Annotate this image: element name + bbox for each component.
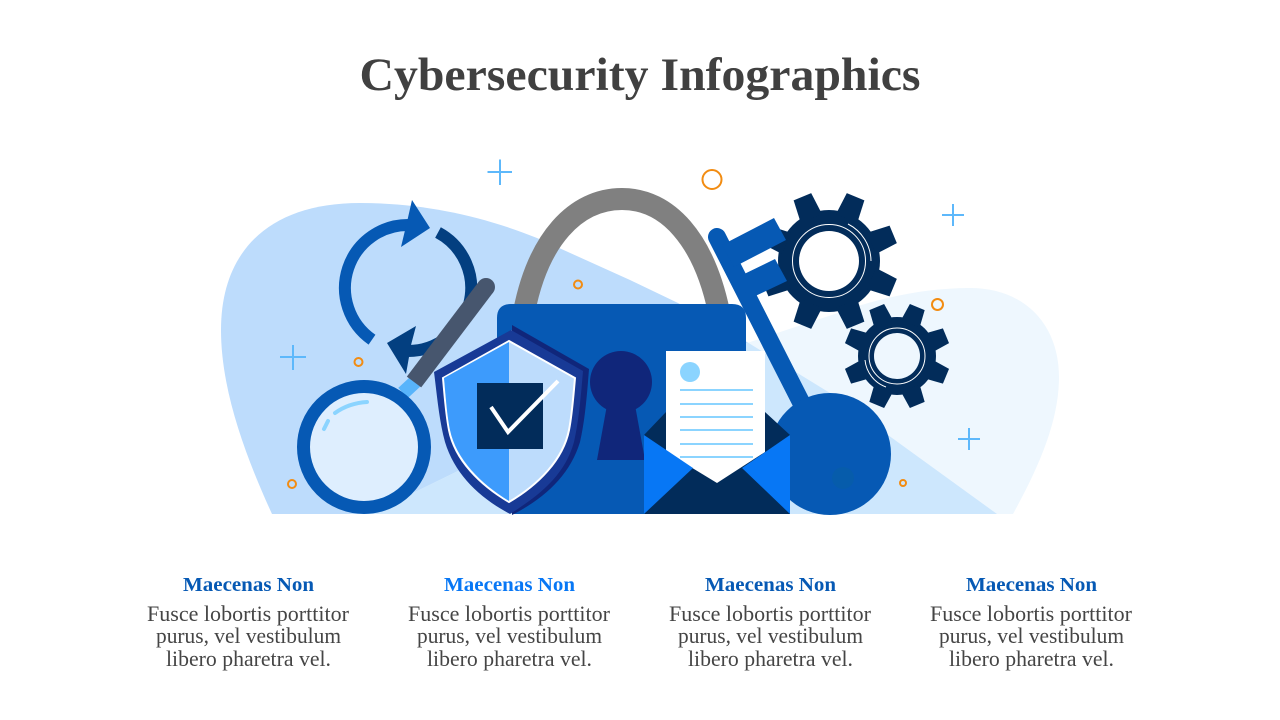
magnifying glass (304, 278, 495, 508)
title: Cybersecurity Infographics (360, 49, 920, 101)
envelope with letter (644, 351, 790, 514)
column 4 (930, 574, 1133, 671)
background blob: left (221, 203, 997, 514)
padlock shackle (524, 199, 719, 312)
column 1: Maecenas Non (183, 574, 314, 596)
column 3 (669, 574, 872, 671)
background blob overlap (370, 342, 997, 514)
column 3: Fusce lobortis porttitor (669, 601, 872, 626)
column 2 (408, 574, 611, 671)
column 3: purus, vel vestibulum (678, 623, 863, 648)
column 2: libero pharetra vel. (427, 646, 592, 671)
column 3: Maecenas Non (705, 574, 836, 596)
shield with check (434, 325, 589, 515)
column 4: libero pharetra vel. (949, 646, 1114, 671)
keyhole (590, 351, 652, 460)
orange ring dots (288, 170, 943, 488)
padlock body (497, 304, 746, 514)
column 2: purus, vel vestibulum (417, 623, 602, 648)
column 4: Fusce lobortis porttitor (930, 601, 1133, 626)
small gear (844, 303, 950, 409)
column 2: Maecenas Non (444, 574, 575, 596)
key (717, 218, 891, 515)
column 1: Fusce lobortis porttitor (147, 601, 350, 626)
column 4: Maecenas Non (966, 574, 1097, 596)
column 1: purus, vel vestibulum (156, 623, 341, 648)
column 2: Fusce lobortis porttitor (408, 601, 611, 626)
column 3: libero pharetra vel. (688, 646, 853, 671)
column 1: libero pharetra vel. (166, 646, 331, 671)
background blob: right (370, 288, 1059, 514)
column 1 (147, 574, 350, 671)
refresh arrows (345, 200, 471, 374)
illustration: cybersecurity scene (221, 160, 1059, 515)
large gear (760, 192, 898, 330)
column 4: purus, vel vestibulum (939, 623, 1124, 648)
plus sparkles (280, 160, 980, 450)
